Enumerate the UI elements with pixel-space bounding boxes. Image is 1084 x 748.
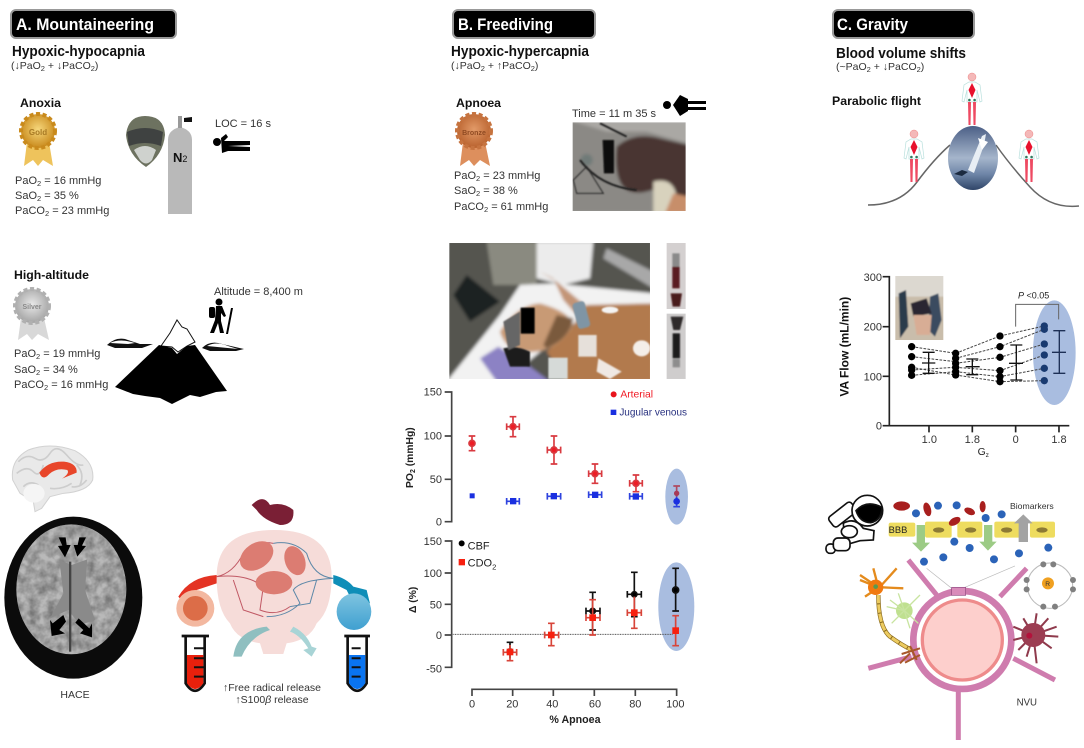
heading: B. Freediving: B. Freediving bbox=[458, 15, 553, 34]
text: apnoea blood gases: 2 bbox=[476, 174, 480, 183]
illustration: brain with corpus callosum bbox=[12, 446, 93, 512]
axis: delta percent bbox=[408, 536, 452, 675]
text: high-altitude blood gases: PaCO bbox=[14, 379, 44, 391]
x axis: % apnoea: 100 bbox=[666, 698, 684, 710]
icon: hiker bbox=[209, 298, 233, 334]
x axis: % apnoea: 40 bbox=[546, 698, 558, 710]
subheading: blood volume shifts: ) bbox=[921, 61, 924, 73]
icon: body figure left bbox=[904, 130, 924, 182]
subheading: hypoxic-hypercapnia: Hypoxic-hypercapnia bbox=[451, 44, 590, 60]
text: apnoea blood gases: = 23 mmHg bbox=[480, 170, 540, 182]
x axis: % apnoea: 80 bbox=[629, 698, 641, 710]
chart: PO2 vs % apnoea bbox=[405, 386, 688, 529]
legend: 2 bbox=[492, 562, 496, 571]
text: high-altitude blood gases: = 34 % bbox=[40, 364, 78, 376]
text: apnoea blood gases bbox=[454, 170, 548, 214]
axes: z bbox=[986, 452, 989, 459]
photo: venous blood sample tube bbox=[667, 314, 686, 379]
data: mean and SD bars bbox=[922, 331, 1066, 380]
axis: delta percent: 0 bbox=[436, 630, 442, 642]
image: HACE brain scan bbox=[4, 517, 142, 679]
axis: PO2: 100 bbox=[424, 430, 442, 442]
legend: Jugular venous bbox=[619, 408, 687, 419]
axis: PO2: 50 bbox=[430, 474, 442, 486]
subheading: hypoxic-hypercapnia: 2 bbox=[481, 64, 485, 73]
label: time: Time = 11 m 35 s bbox=[572, 108, 657, 120]
axes: 100 bbox=[864, 371, 882, 383]
label: HACE: HACE bbox=[60, 689, 90, 701]
text: apnoea blood gases: 2 bbox=[476, 189, 480, 198]
astrocyte bbox=[887, 593, 920, 628]
axis: PO2: 0 bbox=[436, 517, 442, 529]
text: anoxia blood gases: = 35 % bbox=[41, 190, 79, 202]
axes: 1.0 bbox=[922, 434, 937, 446]
text: high-altitude blood gases: 2 bbox=[44, 383, 48, 392]
text: high-altitude blood gases: 2 bbox=[36, 352, 40, 361]
subheading: hypoxic-hypercapnia: + ↑PaCO bbox=[485, 60, 531, 72]
subheading: hypoxic-hypercapnia: ) bbox=[535, 60, 538, 72]
annotation: P value bracket bbox=[1016, 291, 1059, 327]
photo: arterial blood sample tube bbox=[667, 243, 686, 309]
text: apnoea blood gases: 2 bbox=[484, 205, 488, 214]
icon: pilot helmet and mask bbox=[126, 116, 165, 167]
subheading: hypoxic-hypocapnia: (↓PaO bbox=[11, 60, 41, 72]
axis: delta percent: -50 bbox=[426, 663, 442, 675]
text: free radical and S100B release: ↑S100β release bbox=[235, 694, 309, 706]
axis: PO2: 2 bbox=[410, 469, 417, 473]
text: apnoea blood gases: SaO bbox=[454, 185, 476, 197]
label: High-altitude: High-altitude bbox=[14, 270, 89, 282]
x axis: % apnoea: 60 bbox=[589, 698, 601, 710]
icon: unconscious person bbox=[213, 134, 250, 153]
astrocyte feet and vessel bbox=[868, 560, 1055, 740]
subheading: blood volume shifts: + ↓PaCO bbox=[871, 61, 917, 73]
label: altitude: Altitude = 8,400 m bbox=[214, 286, 303, 298]
text: free radical and S100B release bbox=[223, 682, 321, 706]
data: arterial bbox=[469, 417, 680, 503]
text: high-altitude blood gases: PaO bbox=[14, 348, 36, 360]
icon: gold medal bbox=[21, 114, 55, 166]
data: CBF bbox=[507, 568, 679, 658]
text: anoxia blood gases: SaO bbox=[15, 190, 37, 202]
icon: nitrogen tank: N2 bbox=[173, 150, 187, 165]
text: high-altitude blood gases: = 16 mmHg bbox=[48, 379, 108, 391]
panel: C. Gravity bbox=[826, 10, 1079, 740]
photo: apnoea subject with headgear bbox=[570, 120, 688, 213]
panel: A. Mountaineering bbox=[4, 10, 371, 706]
arrow: biomarkers up bbox=[1014, 514, 1033, 542]
heading: A. Mountaineering bbox=[11, 10, 176, 38]
icon: body figure right bbox=[1019, 130, 1039, 182]
axis: PO2: 150 bbox=[424, 386, 442, 398]
chart: CBF and CDO2 vs % apnoea bbox=[408, 536, 694, 726]
microglia bbox=[1013, 613, 1058, 663]
subheading: hypoxic-hypocapnia: + ↓PaCO bbox=[45, 60, 91, 72]
axis: PO2: (mmHg) bbox=[405, 427, 416, 469]
text: high-altitude blood gases bbox=[14, 348, 108, 392]
panel: B. Freediving bbox=[405, 10, 706, 726]
text: anoxia blood gases bbox=[15, 175, 109, 218]
chart: VA flow vs Gz bbox=[837, 272, 1076, 459]
x axis: % apnoea: % Apnoea bbox=[549, 714, 601, 726]
x axis: % apnoea: 0 bbox=[469, 698, 475, 710]
subheading: hypoxic-hypercapnia: 2 bbox=[531, 64, 535, 73]
label: Biomarkers: Biomarkers bbox=[1010, 501, 1054, 511]
axes: G bbox=[978, 447, 986, 458]
text: anoxia blood gases: PaCO bbox=[15, 205, 45, 217]
subheading: blood volume shifts: 2 bbox=[917, 65, 921, 74]
label: parabolic flight: Parabolic flight bbox=[832, 96, 921, 108]
red blood cells bbox=[893, 501, 986, 528]
label: Apnoea: Apnoea bbox=[456, 98, 502, 110]
axes: 1.8 bbox=[965, 434, 980, 446]
free radical: R bbox=[1045, 581, 1050, 588]
subheading: hypoxic-hypercapnia bbox=[451, 44, 590, 73]
data: CDO2 bbox=[503, 597, 679, 661]
legend bbox=[611, 390, 687, 419]
label: BBB: BBB bbox=[889, 525, 907, 535]
photo: subjects in flight bbox=[895, 276, 944, 340]
x axis: % apnoea: 20 bbox=[506, 698, 518, 710]
text: anoxia blood gases: 2 bbox=[45, 209, 49, 218]
subheading: hypoxic-hypocapnia: 2 bbox=[41, 64, 45, 73]
axes bbox=[837, 272, 1069, 459]
axes: 300 bbox=[864, 272, 882, 284]
icon: prone diver bbox=[663, 95, 706, 116]
curve: parabolic flight path bbox=[868, 145, 1079, 206]
photo: ultrasound on subject's neck bbox=[447, 240, 653, 382]
x axis: % apnoea bbox=[469, 689, 684, 726]
axes: 200 bbox=[864, 322, 882, 334]
heading: B. Freediving bbox=[453, 10, 595, 38]
legend: CBF bbox=[468, 540, 490, 552]
zoom guide lines bbox=[927, 566, 1015, 588]
label: LOC: LOC = 16 s bbox=[215, 118, 271, 130]
subheading: blood volume shifts: Blood volume shifts bbox=[836, 46, 966, 62]
data: paired flow lines bbox=[912, 326, 1044, 382]
icon: bronze medal: Bronze bbox=[462, 130, 486, 137]
text: apnoea blood gases: = 38 % bbox=[480, 185, 518, 197]
data: points bbox=[908, 332, 1004, 385]
neuron bbox=[860, 568, 920, 663]
text: anoxia blood gases: PaO bbox=[15, 175, 37, 187]
subheading: blood volume shifts bbox=[836, 46, 966, 74]
icon: nitrogen tank bbox=[168, 116, 192, 214]
label: Anoxia: Anoxia bbox=[20, 98, 62, 110]
arrows: transport bbox=[912, 525, 997, 552]
axis: PO2: PO bbox=[405, 473, 416, 488]
annotation: P value bracket: P <0.05 bbox=[1018, 291, 1049, 301]
axes: 0 bbox=[876, 421, 882, 433]
illustration: astronaut, blood-brain barrier and neurovascular unit bbox=[826, 495, 1076, 740]
free radical bbox=[1024, 561, 1076, 610]
subheading: hypoxic-hypocapnia bbox=[11, 44, 146, 73]
icon: silver medal: Silver bbox=[22, 304, 42, 311]
axis: delta percent: 150 bbox=[424, 536, 442, 548]
subheading: blood volume shifts: 2 bbox=[867, 65, 871, 74]
image: aircraft in sky bbox=[948, 126, 998, 190]
text: apnoea blood gases: PaCO bbox=[454, 201, 484, 213]
heading: C. Gravity bbox=[833, 10, 974, 38]
heading: A. Mountaineering: A. Mountaineering bbox=[16, 15, 154, 34]
subheading: hypoxic-hypocapnia: Hypoxic-hypocapnia bbox=[12, 44, 146, 60]
blue molecules bbox=[912, 501, 1052, 566]
text: high-altitude blood gases: 2 bbox=[36, 368, 40, 377]
subheading: blood volume shifts: (~PaO bbox=[836, 61, 867, 73]
illustration: brain arterial-venous blood sampling bbox=[176, 499, 371, 691]
icon: mountain with clouds bbox=[107, 320, 244, 404]
axis: delta percent: 100 bbox=[424, 568, 442, 580]
axis: delta percent: Δ (%) bbox=[408, 587, 419, 613]
axis: PO2 bbox=[405, 386, 452, 529]
heading: C. Gravity: C. Gravity bbox=[837, 15, 908, 34]
subheading: hypoxic-hypocapnia: ) bbox=[95, 60, 98, 72]
text: anoxia blood gases: = 23 mmHg bbox=[49, 205, 109, 217]
axis: delta percent: 50 bbox=[430, 599, 442, 611]
icon: astronaut bbox=[826, 495, 883, 553]
text: high-altitude blood gases: SaO bbox=[14, 364, 36, 376]
axes: 1.8 bbox=[1051, 434, 1067, 446]
legend: CDO bbox=[468, 558, 492, 570]
text: free radical and S100B release: ↑Free radical release bbox=[223, 682, 321, 694]
text: anoxia blood gases: 2 bbox=[37, 179, 41, 188]
legend bbox=[459, 540, 496, 571]
icon: silver medal bbox=[15, 289, 49, 340]
legend: Arterial bbox=[620, 390, 653, 401]
data: jugular venous bbox=[470, 491, 680, 507]
label: NVU: NVU bbox=[1017, 697, 1037, 708]
axes: 0 bbox=[1013, 434, 1019, 446]
axes: VA Flow (mL/min) bbox=[837, 297, 851, 397]
text: anoxia blood gases: = 16 mmHg bbox=[41, 175, 101, 187]
subheading: hypoxic-hypocapnia: 2 bbox=[91, 64, 95, 73]
icon: gold medal: Gold bbox=[29, 128, 47, 137]
text: high-altitude blood gases: = 19 mmHg bbox=[40, 348, 100, 360]
icon: bronze medal bbox=[457, 114, 491, 166]
text: apnoea blood gases: PaO bbox=[454, 170, 476, 182]
icon: body figure at top bbox=[962, 73, 982, 125]
text: apnoea blood gases: = 61 mmHg bbox=[488, 201, 548, 213]
endothelial cells bbox=[889, 522, 1055, 538]
subheading: hypoxic-hypercapnia: (↓PaO bbox=[451, 60, 481, 72]
text: anoxia blood gases: 2 bbox=[37, 194, 41, 203]
